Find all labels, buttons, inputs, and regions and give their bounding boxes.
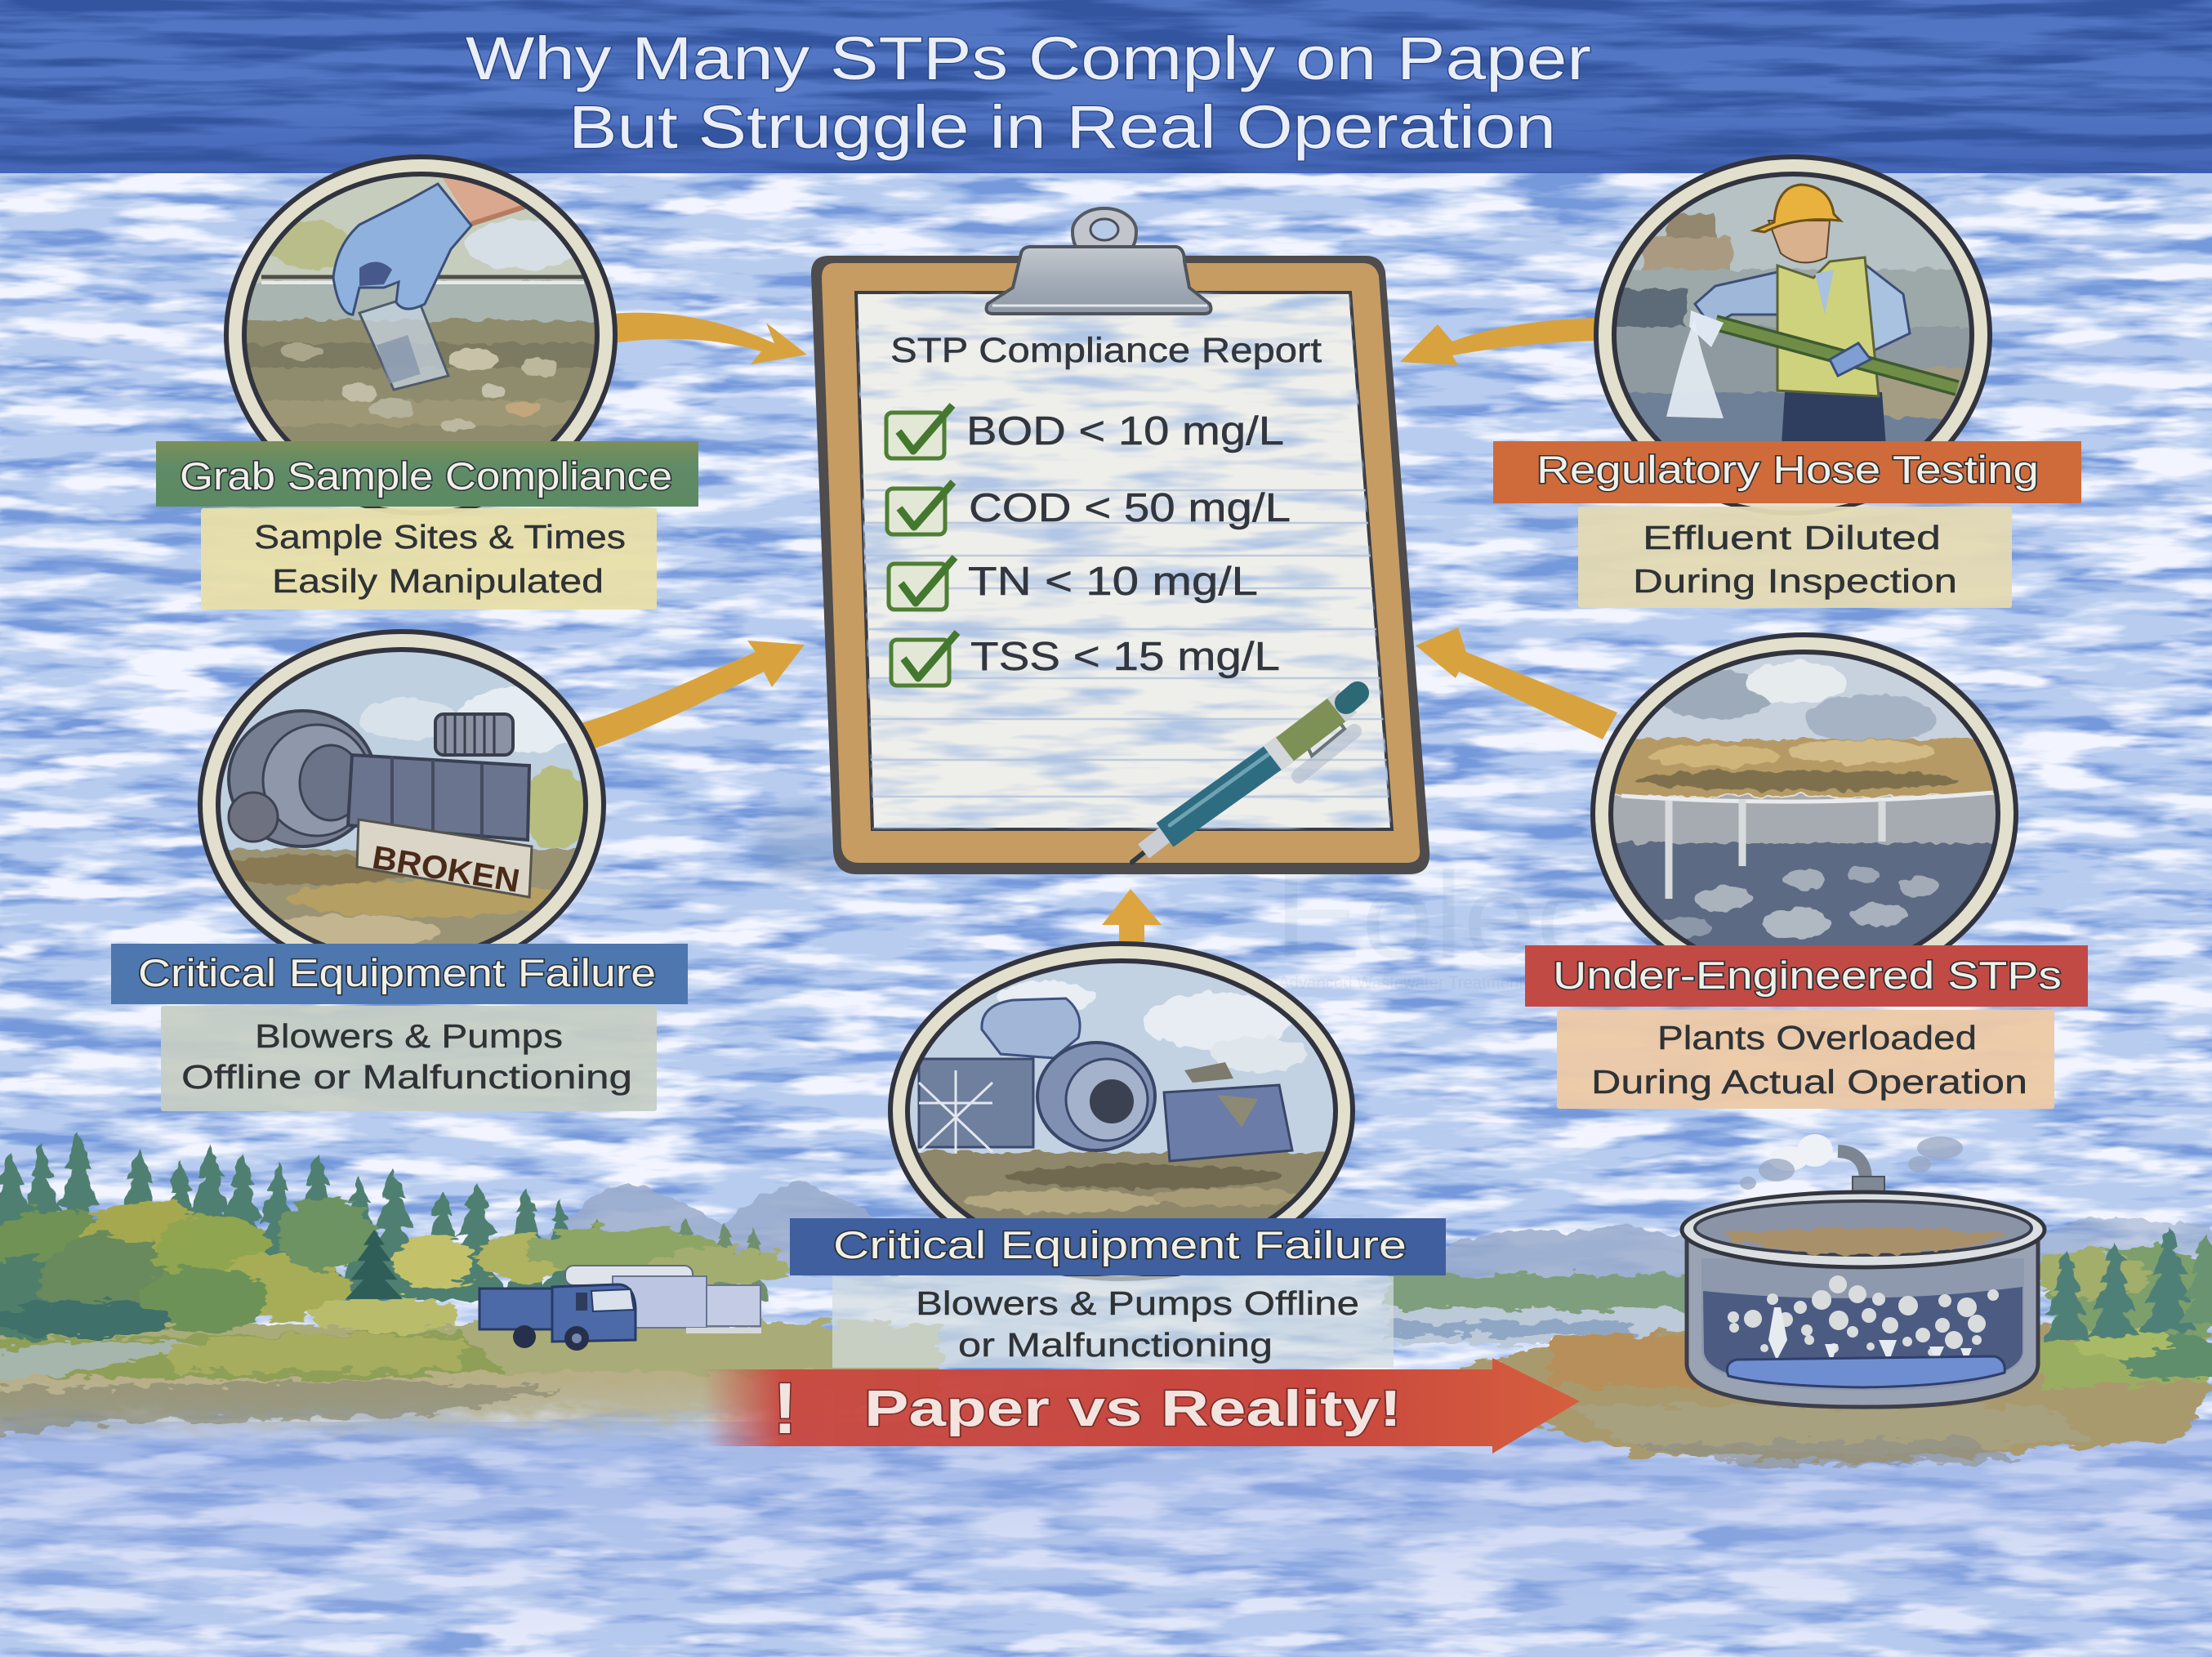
banner label: Grab Sample Compliance [180,454,672,498]
clipboard: STP compliance report [756,208,1429,878]
metal clip [987,208,1211,314]
title: But Struggle in Real Operation [569,93,1556,161]
shadow [756,805,854,878]
title banner [111,944,688,1004]
description text: Blowers & Pumps [255,1017,563,1055]
description box [1557,1010,2054,1109]
icon: truck with containers [479,1266,761,1351]
title [466,25,1591,161]
circular vignette [890,944,1353,1279]
description text: During Actual Operation [1591,1063,2027,1101]
arrow: equipment failure to report [582,641,805,748]
rim [1682,1192,2045,1267]
description text [181,1017,632,1096]
board [811,256,1429,874]
circular vignette [1593,635,2016,993]
arrow: bottom failure to report [1102,889,1162,946]
description text [254,518,626,600]
watermark: Eolec [1274,846,1601,984]
description text: Effluent Diluted [1643,519,1941,556]
icon: pen [1132,693,1358,862]
diffuser pipe [1727,1356,2005,1387]
sign: broken [357,820,532,900]
circular vignette [226,157,615,513]
panel: critical equipment failure, left [111,632,688,1111]
row: COD [887,482,1291,534]
tank body [1687,1230,2038,1407]
banner label: Critical Equipment Failure [138,951,656,994]
watermark: Advanced Wastewater Treatment [1278,972,1523,993]
description text: Blowers & Pumps Offline [916,1284,1359,1322]
row: TN: TN < 10 mg/L [968,560,1258,604]
description text: or Malfunctioning [958,1326,1273,1364]
banner arrow: paper vs reality [702,1358,1580,1454]
icon: aeration tank [1682,1134,2045,1407]
report heading: STP Compliance Report [890,331,1322,370]
sign: broken: BROKEN [370,839,522,900]
panel: grab sample compliance [156,157,698,610]
title banner [790,1218,1446,1275]
title banner [156,441,698,507]
title banner [1525,945,2088,1007]
description box [201,508,657,610]
description box [161,1006,657,1111]
description text: Offline or Malfunctioning [181,1058,632,1096]
forest canopy: foliage [0,1197,792,1340]
description text: Plants Overloaded [1657,1019,1977,1056]
panel: under-engineered STPs [1525,635,2088,1109]
circular vignette [1596,157,1990,513]
paper sheet [856,293,1392,829]
sludge surface [1720,1227,2010,1255]
arrow: grab sample to report [611,313,807,364]
banner label: Critical Equipment Failure [833,1223,1407,1266]
exclamation mark: ! [773,1368,797,1449]
arrow: under-engineered to report [1416,628,1617,739]
panel: regulatory hose testing [1493,157,2081,608]
row: BOD [886,405,1284,458]
arrow label: Paper vs Reality! [864,1381,1402,1437]
row: TSS: TSS < 15 mg/L [970,635,1280,679]
aeration jets [1768,1307,1972,1363]
title: Why Many STPs Comply on Paper [466,25,1591,92]
forest canopy: conifers [0,1132,771,1299]
arrow: hose testing to report [1400,318,1601,365]
description box [832,1276,1394,1368]
banner label: Under-Engineered STPs [1553,954,2062,997]
row: BOD: BOD < 10 mg/L [966,409,1284,453]
landscape: riverbank with forest [0,1132,2212,1467]
right tree line [2034,1246,2212,1379]
description text [916,1284,1359,1364]
description box [1578,507,2012,608]
pipe and steam [1740,1134,1963,1195]
panel: critical equipment failure, bottom centre [790,944,1446,1368]
water [1701,1258,2024,1391]
circular vignette [200,632,604,978]
mountains [539,1181,2212,1283]
header band [0,0,2212,173]
ground strip [0,1275,2212,1467]
title banner [1493,441,2081,503]
banner label: Regulatory Hose Testing [1536,448,2039,491]
row: TN [889,557,1258,610]
row: TSS [891,632,1280,686]
description text: During Inspection [1633,562,1957,600]
description text: Easily Manipulated [272,562,604,600]
description text [1591,1019,2027,1101]
description text: Sample Sites & Times [254,518,626,556]
bubbles [1728,1275,1999,1356]
description text [1633,519,1957,600]
row: COD: COD < 50 mg/L [969,486,1291,530]
